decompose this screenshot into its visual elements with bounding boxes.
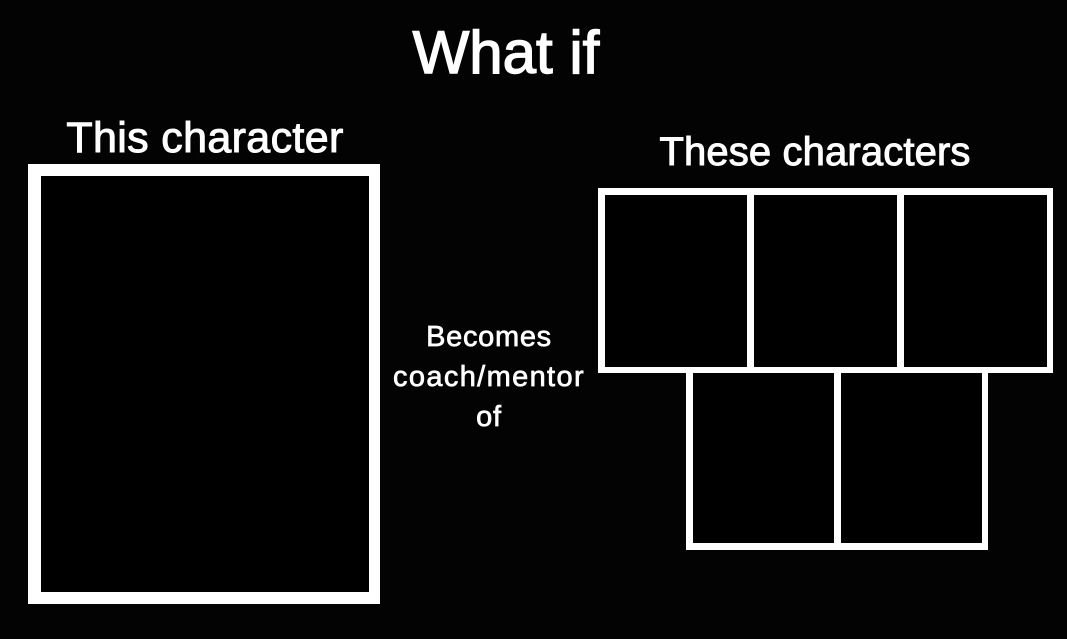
- frame group: five characters: [598, 188, 1053, 550]
- panel: bottom row 2: [834, 367, 988, 550]
- frame: single character: [28, 164, 380, 604]
- panel: top row 3: [897, 188, 1053, 373]
- panel: top row 1: [598, 188, 754, 373]
- label: becomes coach/mentor of: of: [476, 401, 502, 433]
- label: becomes coach/mentor of: coach/mentor: [393, 361, 585, 393]
- panel: bottom row 1: [686, 367, 841, 550]
- title: What if: [413, 19, 599, 86]
- heading: this character: This character: [66, 114, 344, 162]
- heading: these characters: These characters: [659, 130, 971, 174]
- label: becomes coach/mentor of: [393, 321, 585, 433]
- label: becomes coach/mentor of: Becomes: [426, 321, 552, 353]
- panel: top row 2: [747, 188, 904, 373]
